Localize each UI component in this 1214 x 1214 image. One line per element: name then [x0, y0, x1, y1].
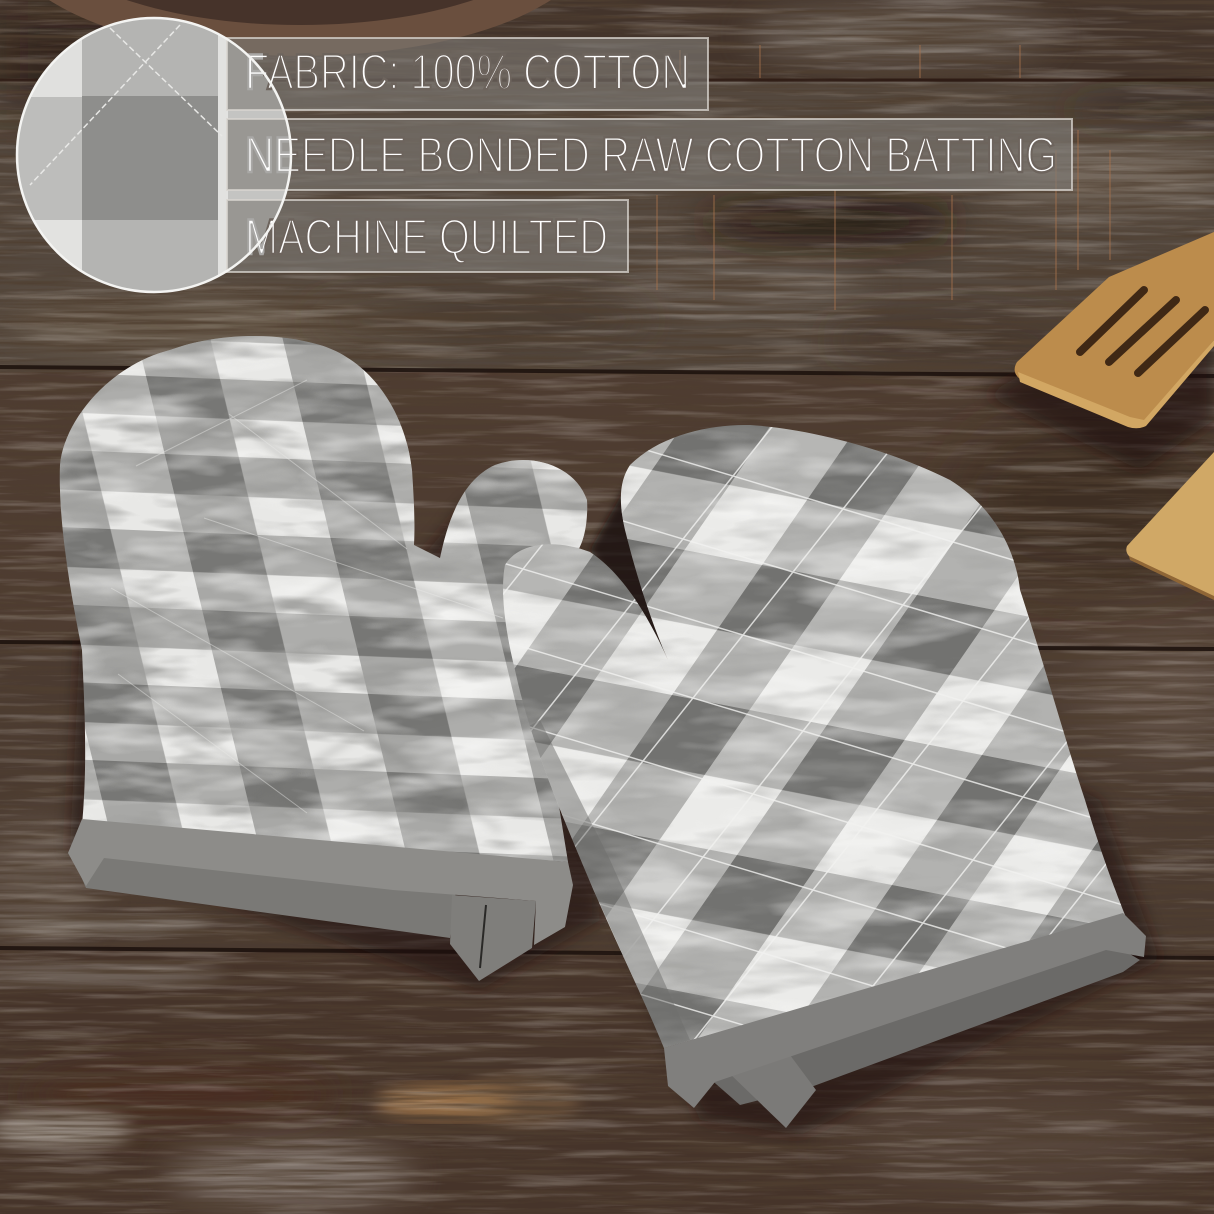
right oven mitt [503, 425, 1146, 1128]
feature label: batting [227, 119, 1072, 190]
fabric close-up circle [17, 17, 298, 293]
mitt cuff band [664, 913, 1146, 1108]
loop slit [480, 905, 486, 968]
hanging loop [727, 1055, 816, 1128]
wooden spatula lower right [1126, 452, 1214, 600]
hanging loop [450, 895, 536, 981]
feature label: fabric: FABRIC: 100% COTTON [245, 44, 690, 100]
shadow under mitts [70, 480, 1160, 1135]
feature label: quilting: MACHINE QUILTED [245, 209, 608, 265]
quilting stitches [503, 427, 1122, 1040]
feature label: quilting [227, 200, 628, 272]
mitt inner opening [700, 940, 1140, 1105]
mitt cuff band [68, 819, 573, 945]
close-up circle outline [17, 18, 291, 292]
wooden spatula upper right [985, 232, 1214, 470]
bowl in top-left corner [5, 0, 595, 56]
mitt inner opening [71, 850, 456, 938]
left oven mitt [40, 320, 600, 981]
quilt stitching on fabric [30, 25, 222, 185]
sunlight and shadow patches [750, 13, 1050, 57]
mitt body with buffalo check [503, 425, 1125, 1048]
feature label: fabric [227, 38, 708, 110]
mitt body with buffalo check [60, 336, 588, 862]
